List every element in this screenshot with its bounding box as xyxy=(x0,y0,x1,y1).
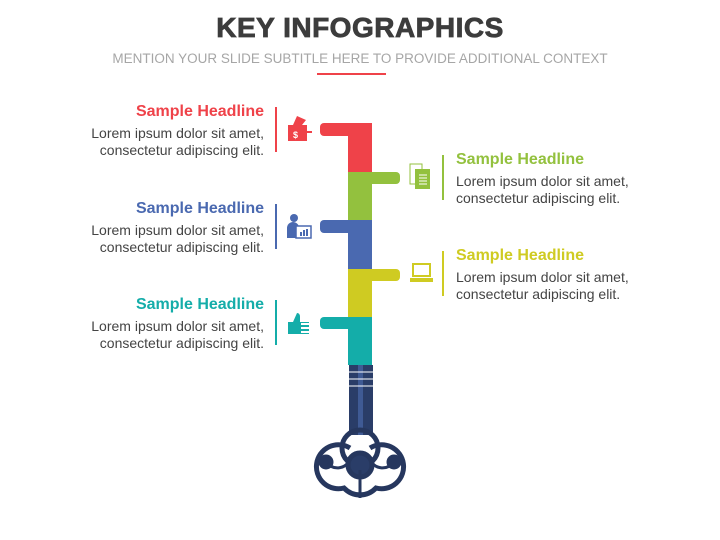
text block: left 3 xyxy=(91,296,264,351)
title: KEY INFOGRAPHICS xyxy=(216,12,504,43)
icon: businessman chart xyxy=(287,214,311,238)
underline xyxy=(317,73,386,75)
icon: documents xyxy=(410,164,430,189)
text block: right 1: Sample Headline xyxy=(456,151,584,168)
text block: left 3: Lorem ipsum dolor sit amet, xyxy=(91,318,264,334)
text block: right 2 xyxy=(456,247,629,302)
text block: left 1: consectetur adipiscing elit. xyxy=(100,142,264,158)
text block: right 2: Sample Headline xyxy=(456,247,584,264)
text block: right 1: Lorem ipsum dolor sit amet, xyxy=(456,173,629,189)
key segments xyxy=(320,123,400,365)
icon: money hand: $ xyxy=(293,130,298,140)
text block: right 2: Lorem ipsum dolor sit amet, xyxy=(456,269,629,285)
text block: left 3: Sample Headline xyxy=(136,296,264,313)
text block: left 1 xyxy=(91,103,264,158)
text block: left 2: consectetur adipiscing elit. xyxy=(100,238,264,254)
key handle xyxy=(316,365,404,498)
subtitle: MENTION YOUR SLIDE SUBTITLE HERE TO PROVIDE ADDITIONAL CONTEXT xyxy=(112,51,608,66)
icon: laptop xyxy=(410,264,433,282)
text block: left 2: Lorem ipsum dolor sit amet, xyxy=(91,222,264,238)
text block: left 2 xyxy=(91,200,264,255)
icon: money hand xyxy=(288,116,312,141)
text block: right 1: consectetur adipiscing elit. xyxy=(456,190,620,206)
text block: left 1: Lorem ipsum dolor sit amet, xyxy=(91,125,264,141)
text block: left 1: Sample Headline xyxy=(136,103,264,120)
text block: left 3: consectetur adipiscing elit. xyxy=(100,334,264,350)
icon: thumbs up xyxy=(288,313,311,334)
text block: left 2: Sample Headline xyxy=(136,200,264,217)
text block: right 1 xyxy=(456,151,629,206)
text block: right 2: consectetur adipiscing elit. xyxy=(456,286,620,302)
